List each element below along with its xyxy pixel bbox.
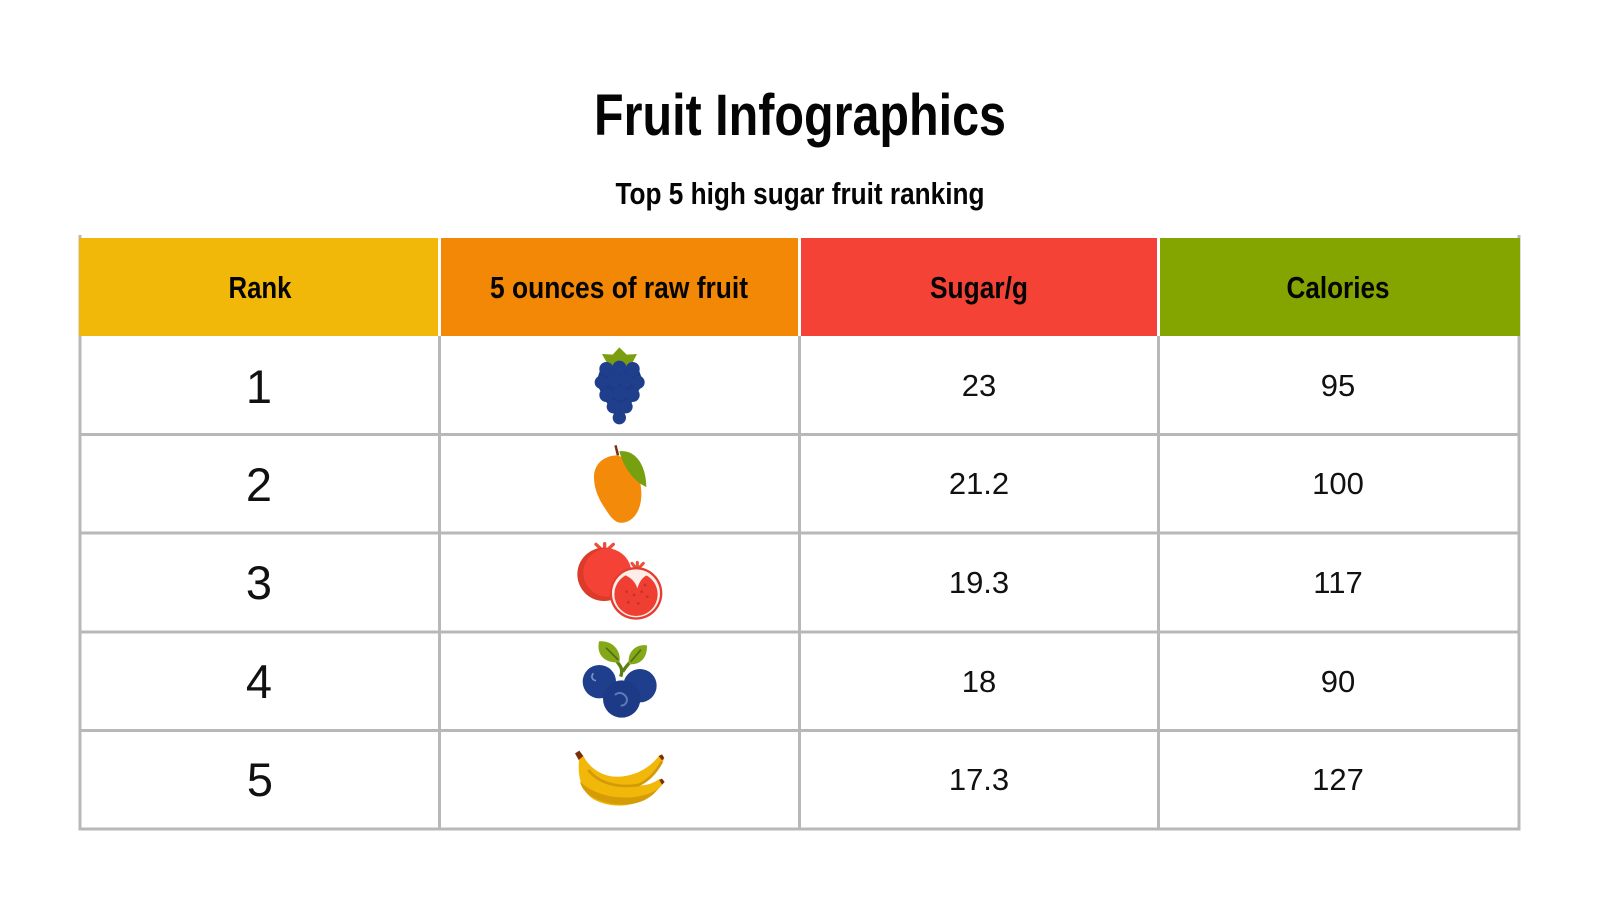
row 3 values: 117	[1313, 565, 1363, 600]
row 2 values	[246, 458, 1364, 511]
row 1 values: 95	[1321, 368, 1355, 403]
row 2 values: 2	[246, 458, 272, 511]
icon: pomegranate	[577, 544, 662, 620]
row 4 values: 4	[246, 655, 272, 708]
title: Fruit Infographics	[594, 83, 1006, 148]
icon: bananas	[575, 751, 665, 806]
row 1 values	[246, 360, 1355, 413]
row 5 values: 127	[1312, 762, 1364, 797]
header: Rank	[79, 238, 438, 336]
row 4 values: 18	[962, 664, 996, 699]
row 3 values	[246, 556, 1363, 609]
header: 5 ounces of raw fruit	[441, 238, 798, 336]
table grid	[78, 235, 1520, 830]
row 3 values: 19.3	[949, 565, 1009, 600]
row 3 values: 3	[246, 556, 272, 609]
row 2 values: 100	[1312, 466, 1364, 501]
header: Calories: Calories	[1286, 270, 1390, 305]
row 4 values: 90	[1321, 664, 1355, 699]
row 4 values	[246, 655, 1355, 708]
header: Calories	[1160, 238, 1520, 336]
header: Rank: Rank	[228, 270, 292, 305]
row 1 values: 1	[246, 360, 272, 413]
icon: mango	[594, 445, 646, 523]
table	[78, 235, 1520, 830]
header: 5 ounces of raw fruit: 5 ounces of raw fruit	[490, 270, 748, 305]
row 5 values	[247, 753, 1364, 806]
subtitle: Top 5 high sugar fruit ranking	[616, 176, 984, 211]
icon: grapes	[595, 347, 645, 424]
row 2 values: 21.2	[949, 466, 1009, 501]
row 5 values: 5	[247, 753, 273, 806]
header: Sugar/g	[801, 238, 1157, 336]
row 5 values: 17.3	[949, 762, 1009, 797]
header: Sugar/g: Sugar/g	[930, 270, 1028, 305]
row 1 values: 23	[962, 368, 996, 403]
icon: blueberries	[583, 641, 657, 718]
